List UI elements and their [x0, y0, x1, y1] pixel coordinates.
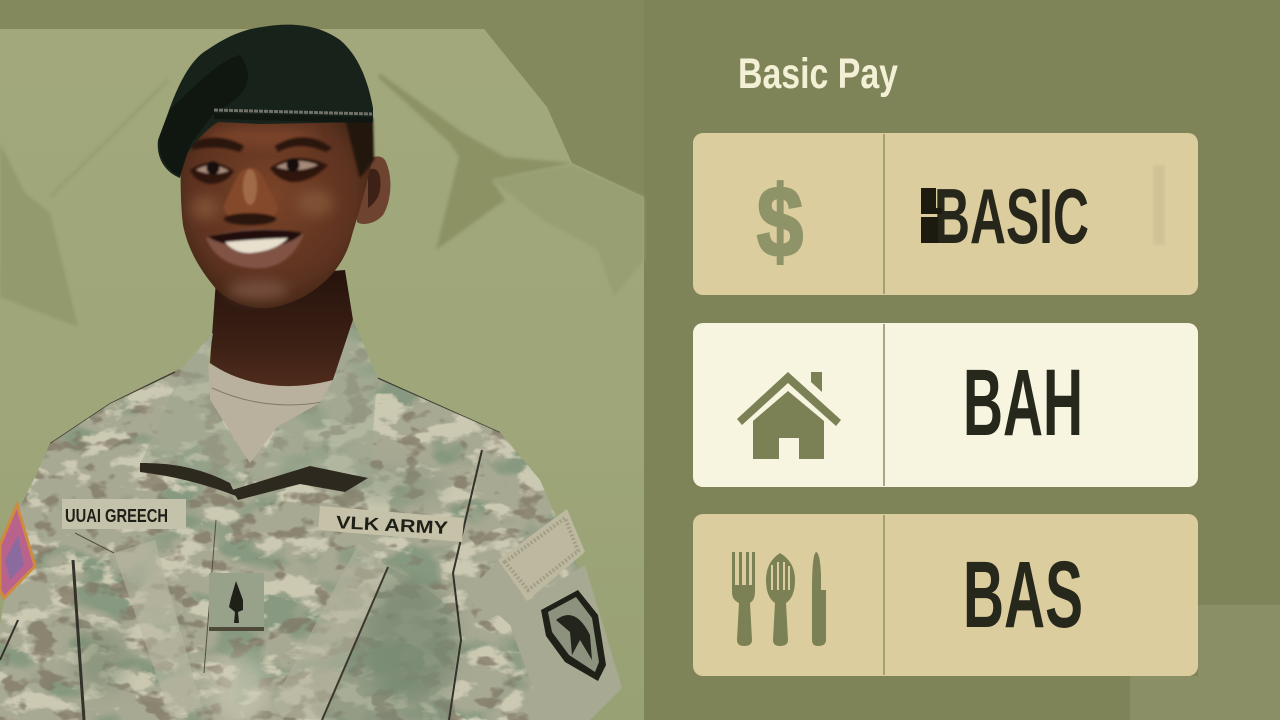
camouflage texture [0, 320, 630, 720]
uniform [0, 320, 630, 720]
seams [50, 372, 175, 443]
mouth interior [208, 230, 303, 247]
beret [158, 25, 373, 178]
nose [224, 168, 278, 218]
hair side [345, 118, 374, 178]
name tape right: VLK ARMY [336, 512, 448, 538]
cheek and chin highlights [191, 129, 333, 300]
label: BASIC: BASIC [934, 172, 1089, 260]
flag patch [498, 509, 585, 601]
ear [356, 156, 390, 224]
head [181, 105, 374, 308]
lower lip [206, 229, 304, 268]
panel: BAS row [693, 514, 1198, 676]
teeth [225, 238, 288, 253]
t-shirt [208, 363, 333, 465]
unit insignia [541, 590, 606, 681]
large camouflage tone patches [72, 470, 455, 720]
label: BAS: BAS [963, 542, 1083, 648]
name tape right [318, 506, 464, 542]
collar right [250, 320, 377, 480]
eye sockets [190, 163, 234, 184]
icon: fork, spoon-fork and knife [732, 552, 826, 646]
shoulder patch left [0, 505, 35, 598]
icon: house [737, 372, 841, 459]
sleeve tab [470, 560, 622, 720]
panel: Basic row [693, 133, 1198, 295]
rank patch [209, 573, 264, 631]
name tape left [62, 499, 186, 529]
label: BAH: BAH [963, 350, 1083, 456]
name tape left: UUAI GREECH [65, 506, 168, 526]
pocket flaps [114, 540, 202, 717]
panel: background shapes behind soldier [0, 29, 644, 720]
neck [210, 270, 353, 387]
illustration: soldier [0, 25, 630, 720]
glitch block before label [921, 188, 942, 243]
collar shadows [140, 463, 368, 500]
collar left [140, 333, 247, 483]
icon: dollar sign: $ [757, 166, 803, 278]
heading: Basic Pay [738, 50, 898, 98]
panel: BAH row [693, 323, 1198, 487]
pocket shading [322, 567, 461, 720]
brows [192, 137, 332, 152]
facial features [190, 137, 332, 268]
eyes [196, 165, 229, 174]
